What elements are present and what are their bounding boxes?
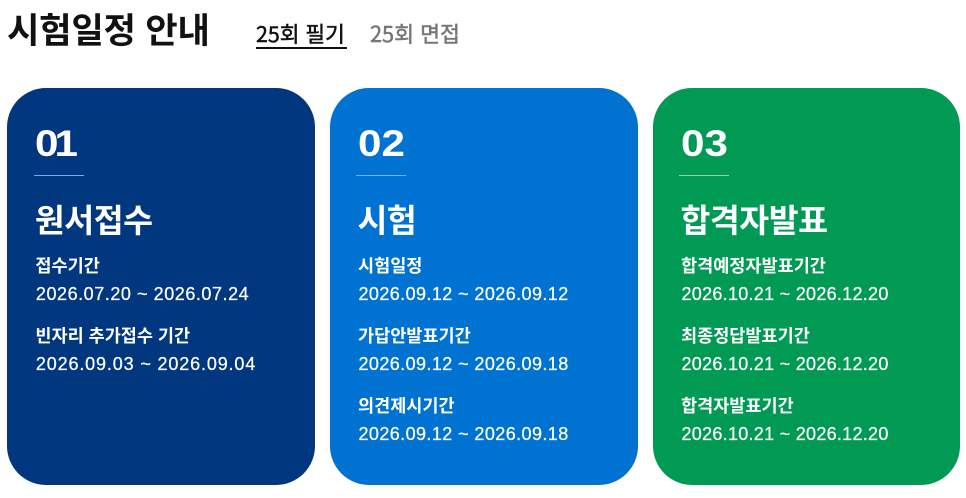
dates: 빈자리 추가접수 기간: 2026.09.03 ~ 2026.09.04 <box>36 354 256 374</box>
label: 합격자발표기간: 합격자발표기간 <box>681 392 794 418</box>
heading: 원서접수: 원서접수 <box>35 194 152 242</box>
step number 01: 01 <box>35 122 74 164</box>
panel: 01 원서접수 <box>7 88 315 484</box>
label: 가답안발표기간: 가답안발표기간 <box>358 322 471 348</box>
step number 03: 03 <box>681 122 728 164</box>
label: 접수기간: 접수기간 <box>35 252 100 278</box>
dates: 합격자발표기간: 2026.10.21 ~ 2026.12.20 <box>682 424 889 444</box>
panel: 03 합격자발표 <box>653 88 960 484</box>
title: 시험일정 안내 <box>7 3 210 54</box>
dates: 가답안발표기간: 2026.09.12 ~ 2026.09.18 <box>358 354 569 374</box>
step number 02: 02 <box>358 122 405 164</box>
dates: 의견제시기간: 2026.09.12 ~ 2026.09.18 <box>358 424 569 444</box>
label: 빈자리 추가접수 기간: 빈자리 추가접수 기간 <box>35 322 190 348</box>
dates: 합격예정자발표기간: 2026.10.21 ~ 2026.12.20 <box>682 284 889 304</box>
panel: 02 시험 <box>330 88 638 484</box>
dates: 접수기간: 2026.07.20 ~ 2026.07.24 <box>36 284 249 304</box>
heading: 합격자발표: 합격자발표 <box>680 194 828 242</box>
dates: 최종정답발표기간: 2026.10.21 ~ 2026.12.20 <box>682 354 889 374</box>
tab: 25회 필기 (active): 25회 필기 <box>256 18 345 49</box>
label: 최종정답발표기간: 최종정답발표기간 <box>681 322 810 348</box>
dates: 시험일정: 2026.09.12 ~ 2026.09.12 <box>358 284 569 304</box>
label: 시험일정: 시험일정 <box>358 252 422 278</box>
heading: 시험: 시험 <box>358 194 416 242</box>
tab: 25회 면접: 25회 면접 <box>370 18 460 49</box>
label: 의견제시기간: 의견제시기간 <box>358 392 455 418</box>
label: 합격예정자발표기간: 합격예정자발표기간 <box>681 252 826 278</box>
